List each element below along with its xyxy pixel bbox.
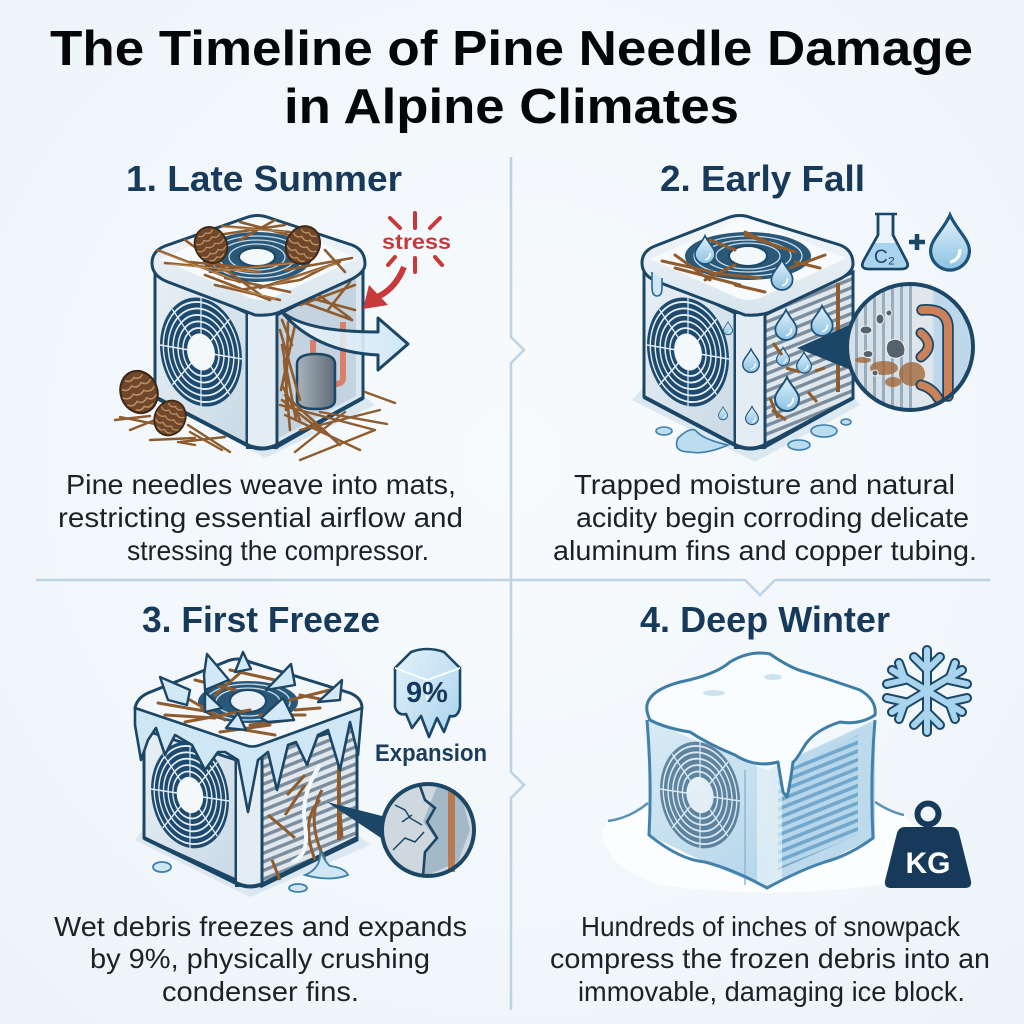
icon: stress burst — [363, 213, 451, 309]
corrosion flecks — [770, 343, 825, 420]
heading: 4. Deep Winter: 4. Deep Winter — [640, 599, 890, 640]
text: first freeze description: Wet debris freezes and expands — [54, 911, 467, 942]
text: deep winter description: Hundreds of inches of snowpack — [581, 911, 960, 942]
axial fan — [160, 291, 242, 413]
pine cones — [114, 220, 326, 441]
compressor — [297, 322, 343, 409]
text: first freeze description — [54, 911, 467, 1007]
panel: early fall — [553, 158, 977, 566]
needle mats — [115, 220, 395, 460]
text: first freeze description: by 9%, physically crushing — [90, 943, 430, 974]
snow cap — [647, 653, 875, 797]
clogged needles in opening — [280, 282, 355, 445]
icon: snowflake — [887, 650, 967, 732]
axial fan under ice — [660, 736, 740, 854]
icon: acid flask plus water — [862, 214, 969, 270]
illustration: unit clogged with needles — [114, 216, 408, 460]
icon: acid flask plus water: C₂ — [874, 247, 895, 268]
ice shards — [160, 652, 342, 730]
title: The Timeline of Pine Needle Damage — [50, 22, 973, 76]
callout: magnified corrosion — [797, 284, 973, 410]
water drops — [652, 236, 833, 425]
top face and ice band — [135, 659, 362, 752]
text: first freeze description: condenser fins. — [162, 976, 359, 1007]
title — [50, 22, 973, 134]
icon: 9% expansion ice cube — [375, 649, 487, 767]
text: late summer description — [58, 469, 463, 566]
wet needles — [662, 232, 825, 292]
illustration: unit encased in ice and snow — [603, 653, 935, 892]
arrow: airflow — [281, 311, 408, 370]
lid — [152, 216, 365, 315]
icon: KG weight: KG — [906, 847, 950, 880]
melt puddles — [153, 850, 348, 892]
text: late summer description: Pine needles weave into mats, — [66, 469, 456, 500]
text: deep winter description — [550, 911, 990, 1007]
text: early fall description — [553, 469, 977, 566]
heading: 3. First Freeze: 3. First Freeze — [142, 599, 380, 640]
illustration: corroding wet unit — [632, 216, 860, 462]
text: early fall description: acidity begin corroding delicate — [576, 502, 969, 533]
heading: 2. Early Fall: 2. Early Fall — [660, 158, 865, 199]
lid — [642, 216, 853, 315]
heading: 1. Late Summer: 1. Late Summer — [126, 158, 402, 199]
frozen needles — [158, 670, 330, 735]
dividers — [36, 157, 990, 1010]
title: in Alpine Climates — [284, 80, 739, 134]
text: late summer description: stressing the compressor. — [127, 535, 429, 566]
text: early fall description: aluminum fins and copper tubing. — [553, 535, 977, 566]
axial fan — [151, 736, 229, 854]
text: late summer description: restricting essential airflow and — [58, 502, 463, 533]
panel: deep winter — [550, 599, 990, 1007]
illustration: frozen unit — [135, 652, 370, 897]
panel: late summer — [58, 158, 463, 566]
icon: stress burst: stress — [382, 231, 451, 254]
puddles — [656, 419, 851, 453]
text: early fall description: Trapped moisture and natural — [574, 469, 955, 500]
bent needles and crack — [268, 775, 342, 880]
icon: 9% expansion ice cube: 9% — [406, 677, 448, 709]
axial fan — [647, 291, 729, 413]
icon: 9% expansion ice cube: Expansion — [375, 740, 487, 767]
callout: cracked fins — [327, 784, 474, 876]
icon: KG weight — [885, 804, 971, 888]
text: deep winter description: immovable, damaging ice block. — [578, 976, 965, 1007]
panel: first freeze — [54, 599, 487, 1007]
text: deep winter description: compress the frozen debris into an — [550, 943, 990, 974]
